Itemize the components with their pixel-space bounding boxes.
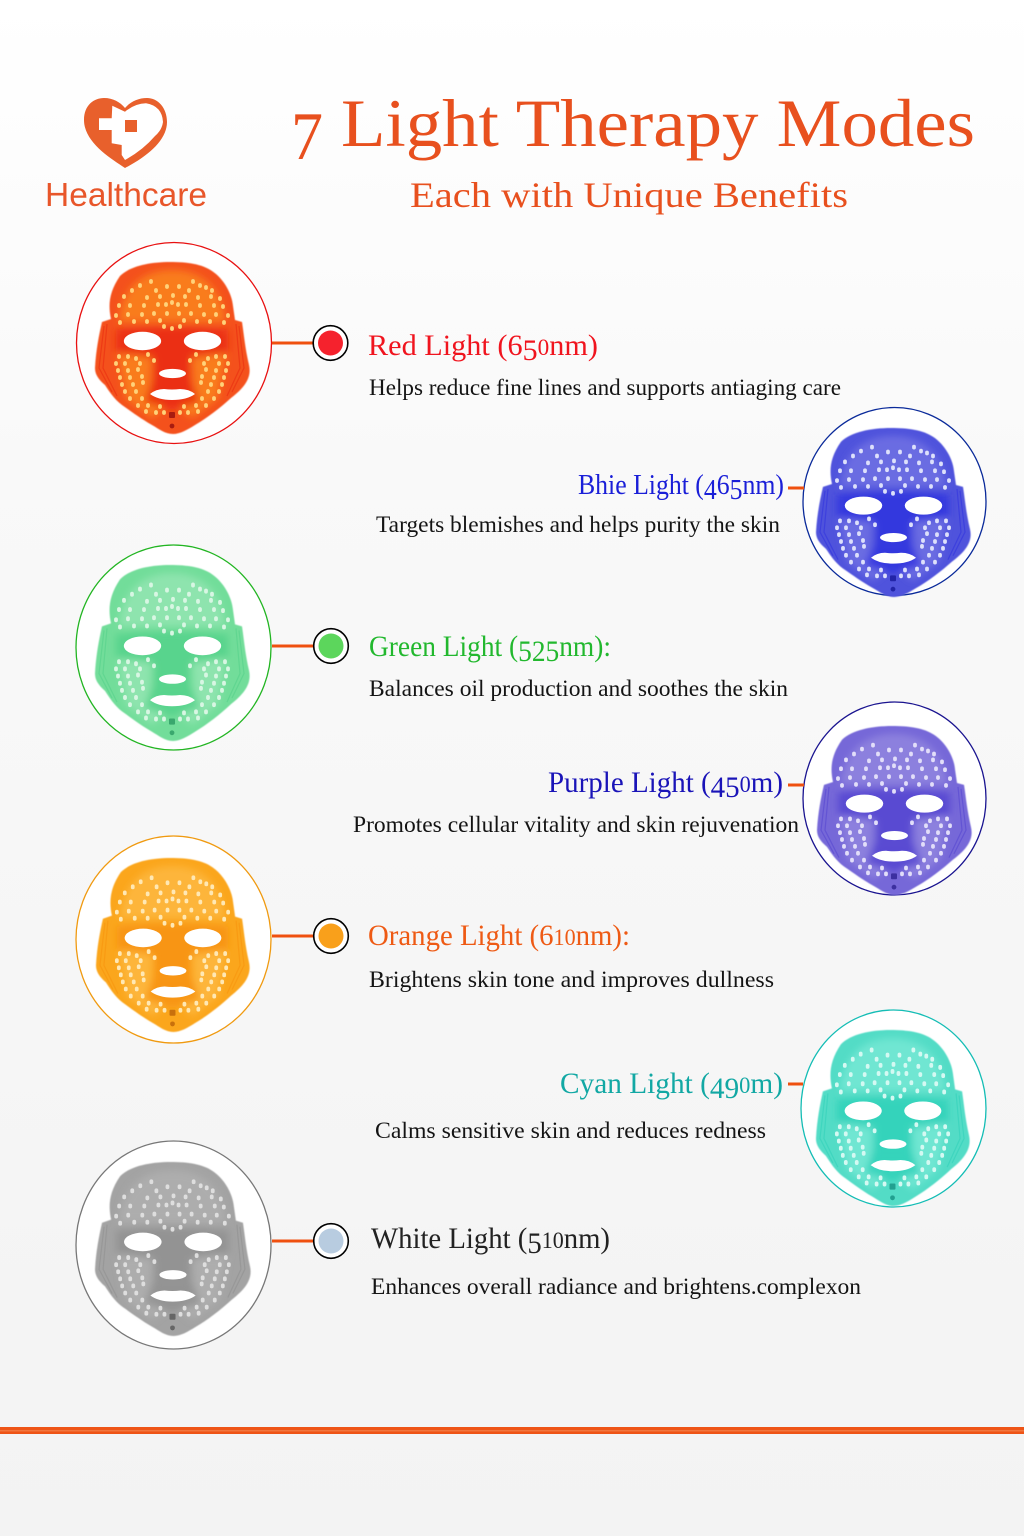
heading: green light: 525	[518, 635, 559, 668]
subtitle: Each with Unique Benefits	[410, 175, 848, 215]
heading: green light: Green Light (	[369, 630, 532, 663]
heading: purple light: Purple Light (	[548, 766, 716, 799]
heading: purple light: m)	[751, 766, 784, 799]
icon: green mask	[76, 545, 271, 750]
icon: white mask	[76, 1141, 271, 1349]
icon: orange mask	[76, 836, 271, 1043]
description: blue light: Targets blemishes and helps purity the skin	[376, 512, 781, 537]
heading: blue light: 5	[730, 475, 743, 506]
connector: purple light	[788, 784, 804, 786]
icon: blue mask	[803, 408, 986, 597]
panel: purple light	[353, 702, 986, 895]
heading: red light: 0	[538, 335, 549, 360]
heading: cyan light: 49	[710, 1072, 739, 1105]
description: orange light: Brightens skin tone and improves dullness	[369, 967, 774, 992]
panel: red light	[76, 242, 841, 444]
heading: blue light: Bhie Light (	[578, 470, 715, 501]
heading: purple light: 45	[711, 771, 740, 804]
heading: cyan light: Cyan Light (	[560, 1067, 713, 1100]
icon: red mask	[76, 242, 272, 444]
panel: orange light	[76, 836, 774, 1043]
description: purple light: Promotes cellular vitality and skin rejuvenation	[353, 812, 800, 837]
description: green light: Balances oil production and soothes the skin	[369, 676, 789, 701]
footer rule	[0, 1427, 1024, 1434]
icon: purple mask	[803, 702, 986, 895]
logo wordmark: Healthcare	[45, 176, 207, 213]
heading: cyan light: m)	[750, 1067, 784, 1100]
heading: blue light: 4	[704, 475, 717, 506]
heading: white light: 5	[527, 1227, 542, 1260]
heading: red light: nm)	[549, 329, 598, 362]
heading: blue light: 6	[717, 470, 730, 501]
description: cyan light: Calms sensitive skin and reduces redness	[375, 1118, 766, 1143]
description: white light: Enhances overall radiance and brightens.complexon	[371, 1274, 862, 1299]
heading: green light: nm):	[559, 630, 611, 663]
panel: blue light	[376, 408, 986, 597]
description: red light: Helps reduce fine lines and supports antiaging care	[369, 375, 841, 400]
panel: cyan light	[375, 1010, 986, 1207]
icon: cyan mask	[801, 1010, 986, 1207]
panel: white light	[76, 1141, 862, 1349]
heading: cyan light: 0	[739, 1073, 750, 1098]
heading: red light: Red Light (6	[368, 329, 521, 362]
heading: purple light: 0	[740, 772, 751, 797]
heading: orange light: Orange Light (610nm):	[368, 919, 630, 952]
heading: red light: 5	[523, 334, 538, 367]
heading: white light: nm)	[564, 1222, 612, 1255]
panel: green light	[76, 545, 789, 750]
connector with orange dot	[272, 919, 348, 953]
heading: blue light: nm)	[743, 470, 784, 501]
heading: white light: White Light (	[371, 1222, 534, 1255]
connector with red dot	[272, 326, 348, 360]
connector: cyan light	[788, 1082, 803, 1086]
logo: Healthcare	[45, 98, 207, 213]
icon: heart with medical cross	[84, 98, 167, 168]
title: Light Therapy Modes	[341, 85, 975, 161]
connector: blue light	[788, 486, 804, 490]
title: 7	[291, 98, 323, 174]
heading: white light: 10	[542, 1228, 564, 1253]
connector with green dot	[272, 629, 348, 663]
connector with pale blue dot	[272, 1224, 348, 1258]
